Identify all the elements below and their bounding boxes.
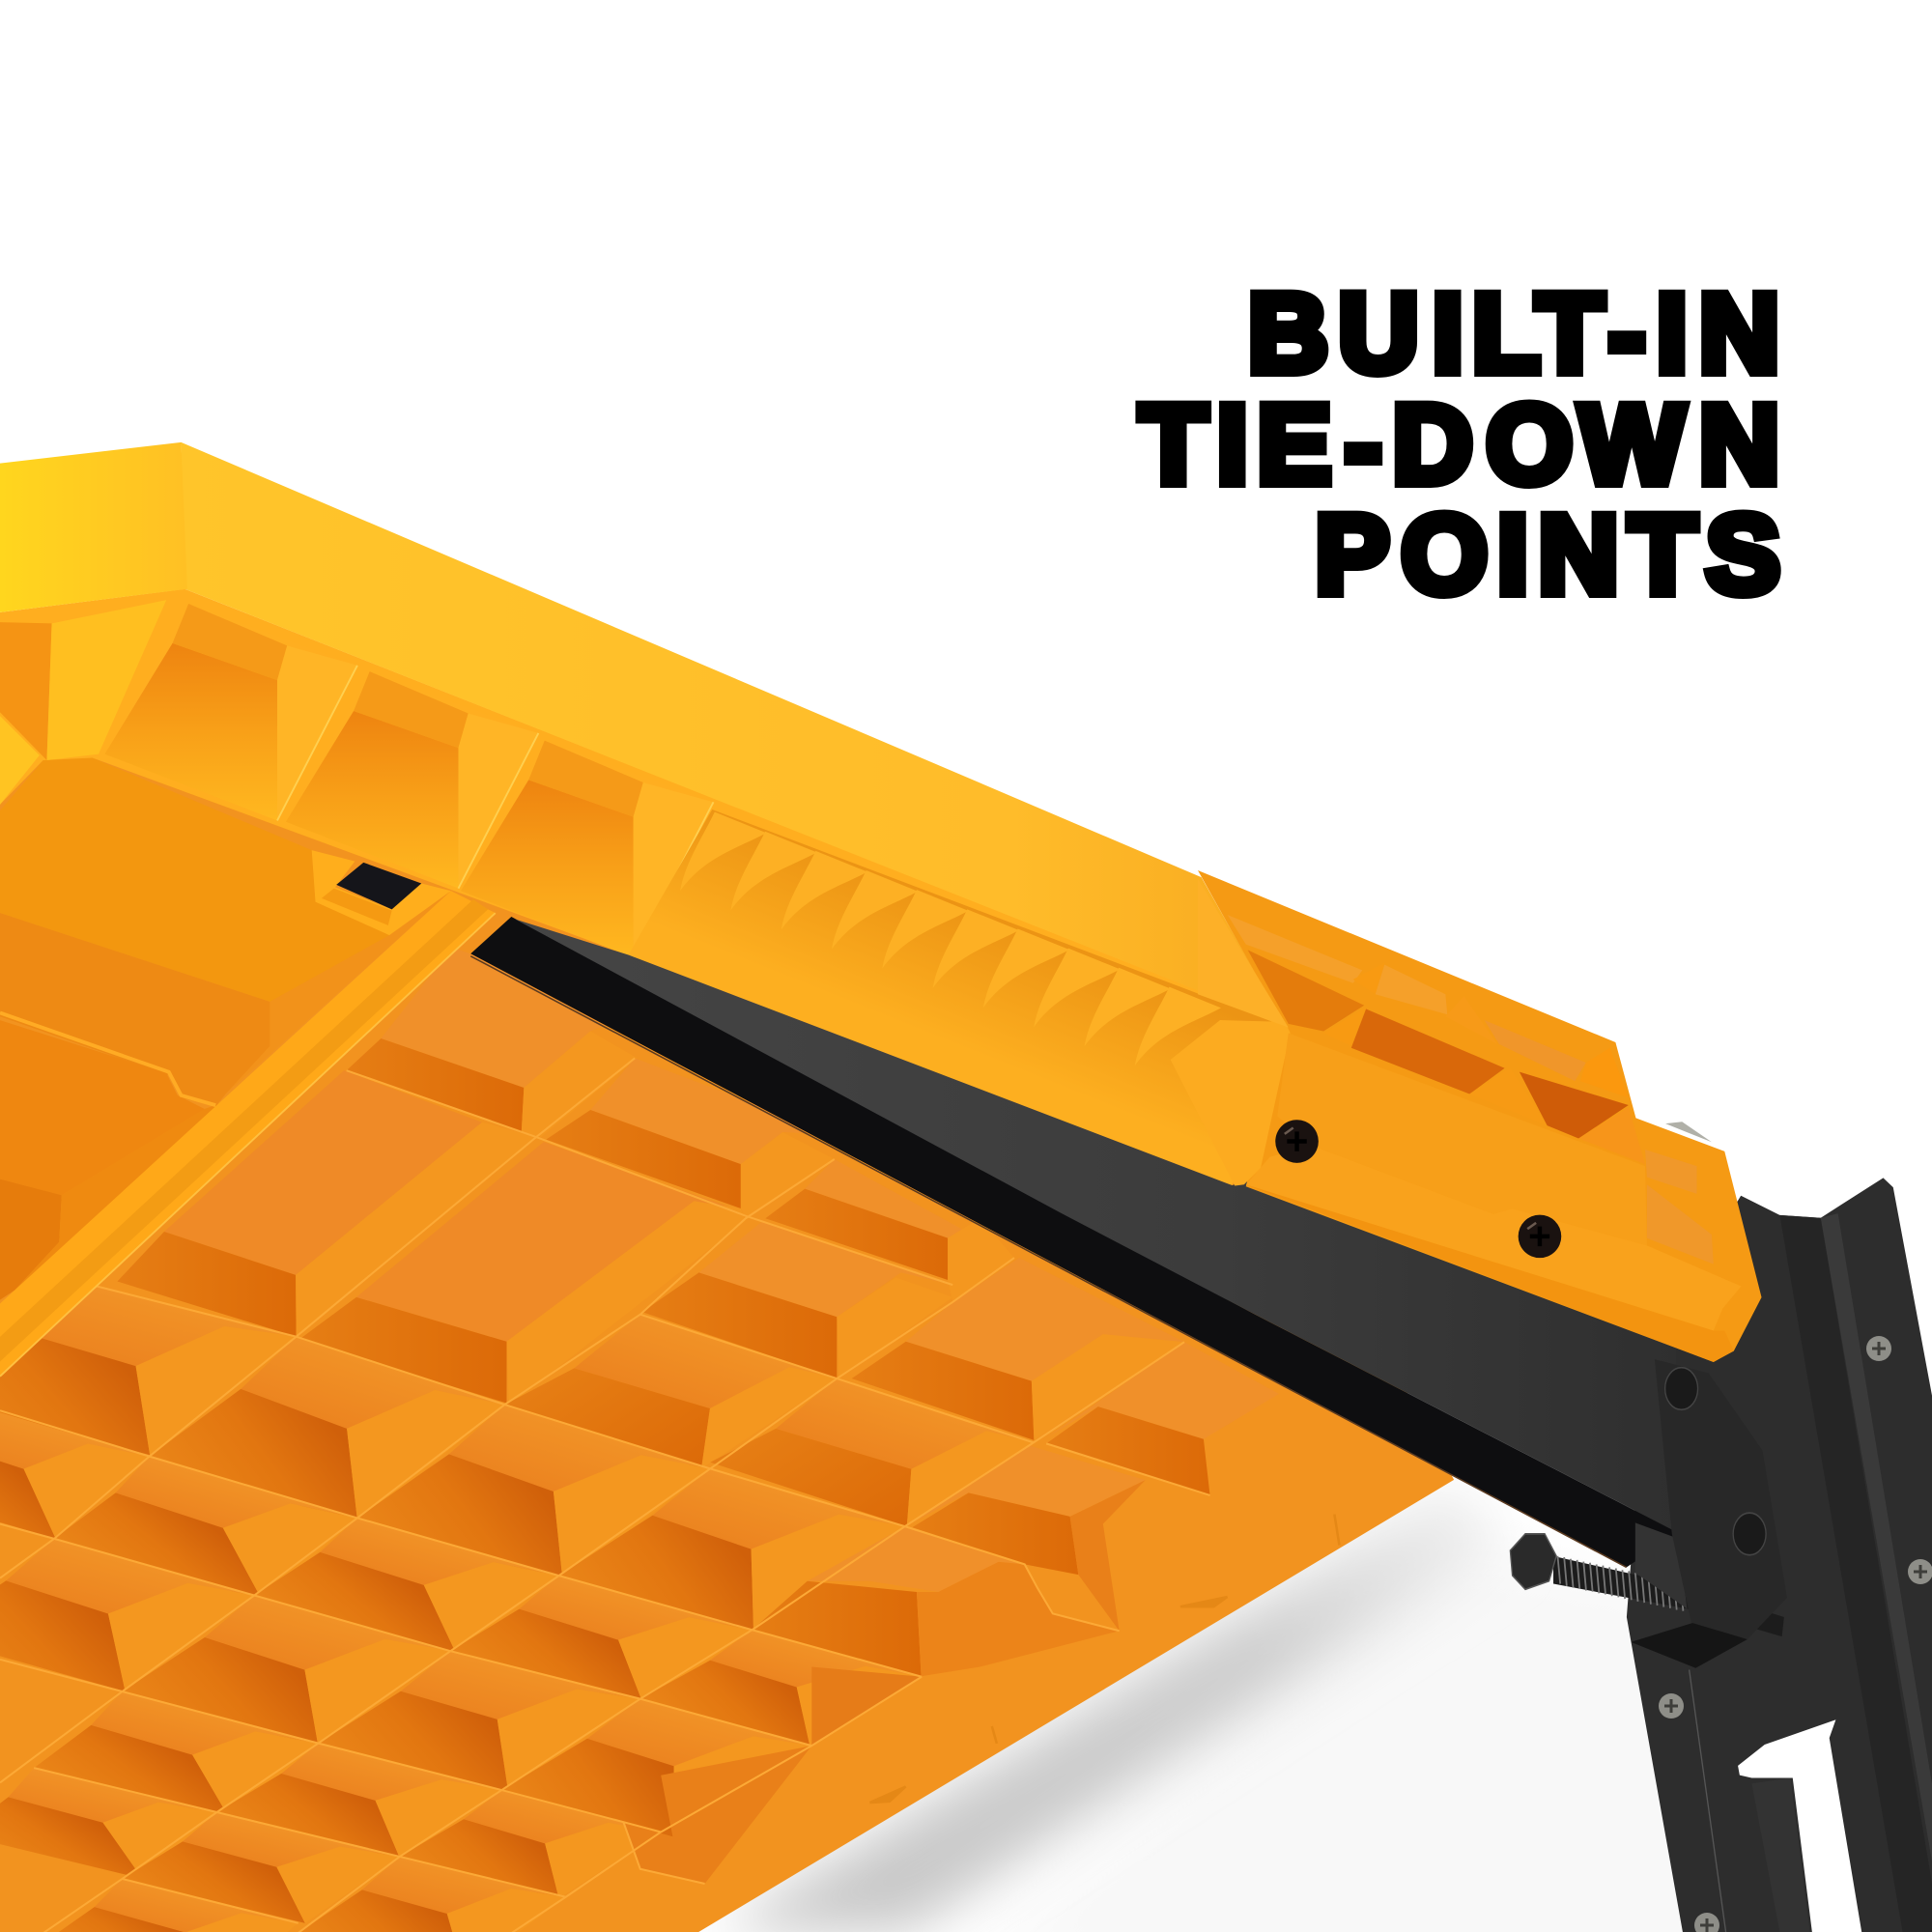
- front face: [1277, 1033, 1647, 1245]
- upper cell, right of rib: [642, 1221, 952, 1378]
- vertical steel wall rail: [1627, 1178, 1932, 1932]
- left corner pocket: [0, 600, 166, 805]
- long centre rail strip: [0, 891, 496, 1377]
- large left cell: [117, 1070, 536, 1337]
- upper cell, top left: [347, 948, 638, 1137]
- yellow tray end block with tie-down: [1171, 870, 1762, 1362]
- repeating grid cells: [0, 1283, 1034, 1932]
- tray base: [0, 727, 1454, 1932]
- title: built-in tie-down points: TIE-DOWN: [1140, 383, 1779, 506]
- stacked plates: [1635, 1522, 1687, 1608]
- notched cell: [623, 1442, 1146, 1884]
- title: built-in tie-down points: POINTS: [1316, 493, 1780, 616]
- far right cell: [1046, 1342, 1279, 1495]
- wedge below rim: [1171, 1020, 1291, 1185]
- fin section: [629, 810, 1282, 1185]
- arm side face: [515, 920, 1678, 1533]
- rib lines: [0, 1058, 1210, 1932]
- silver hardware behind block: [1665, 1122, 1712, 1142]
- threaded bolt: [1510, 1534, 1784, 1636]
- black steel arm: [470, 917, 1678, 1567]
- slot box with black tie-down opening: [312, 850, 451, 935]
- top recesses: [1228, 915, 1645, 1164]
- bracket plate, bolt and end cap: [1510, 1359, 1787, 1668]
- lower channel: [1246, 1146, 1741, 1330]
- pocket wall band: [0, 589, 1282, 1185]
- upper cell, second: [546, 1058, 835, 1218]
- cell right of third rib: [852, 1258, 1184, 1440]
- lip: [1246, 1184, 1734, 1362]
- title: built-in tie-down points: [1140, 272, 1780, 616]
- tray lower lip notches: [870, 1515, 1339, 1803]
- block outline: [1198, 870, 1762, 1362]
- title: built-in tie-down points: BUILT-IN: [1248, 272, 1779, 396]
- white slot in rail: [1738, 1719, 1861, 1932]
- end recesses: [1645, 1150, 1714, 1264]
- end cap: [1631, 1623, 1747, 1668]
- orange tray (underside view): [0, 442, 1454, 1932]
- rail screws: [1659, 1336, 1932, 1932]
- rib grid: [0, 948, 1279, 1932]
- cell below the arm: [765, 1159, 1014, 1302]
- arm underside: [470, 917, 1678, 1567]
- panels left of the rail: [0, 757, 451, 1300]
- top rim face: [0, 442, 1285, 1025]
- large centre cell: [299, 1142, 746, 1406]
- rim wedge: [1198, 879, 1289, 1028]
- rivets: [1665, 1368, 1766, 1555]
- plate: [1655, 1359, 1787, 1639]
- block screws: [1275, 1120, 1561, 1258]
- ground shadow: [715, 1483, 1932, 1932]
- arm brown lower edge: [470, 956, 1627, 1567]
- ribbed pockets: [104, 604, 714, 957]
